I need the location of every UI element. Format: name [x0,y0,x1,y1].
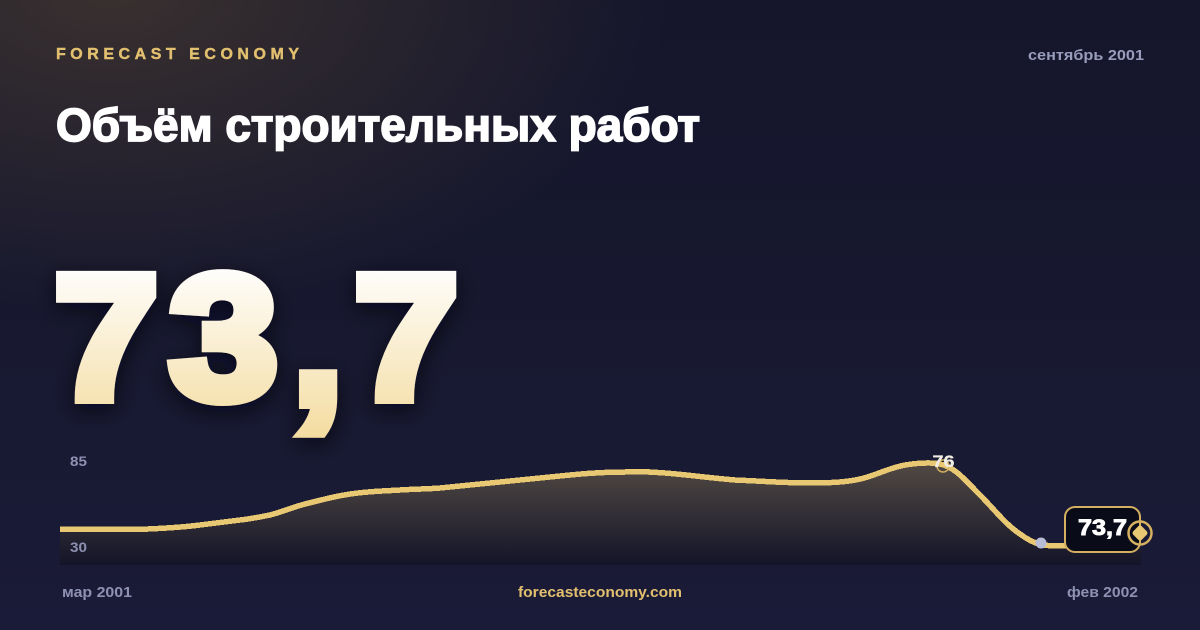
peak marker ring [937,460,949,472]
end date: фев 2002 [1067,585,1138,601]
title: Объём строительных работ [56,100,700,152]
axis label: minimum: 30 [70,540,87,555]
current point marker [1128,522,1152,544]
date label: сентябрь 2001 [1028,47,1144,64]
big value: 3 [170,240,278,436]
axis label: maximum: 85 [70,454,88,469]
big value: , [292,236,344,443]
start date: мар 2001 [62,585,132,601]
source site: forecasteconomy.com [518,584,682,601]
low point dot [1036,538,1046,548]
big value: 7 [54,240,158,436]
current value callout: 73,7 [1078,515,1127,540]
current value callout [1065,507,1140,552]
big value: 7 [354,240,458,436]
big value [54,236,458,443]
chart: area and line [60,463,1141,565]
brand label: FORECAST ECONOMY [56,46,299,63]
peak value label: 76 [932,452,954,471]
